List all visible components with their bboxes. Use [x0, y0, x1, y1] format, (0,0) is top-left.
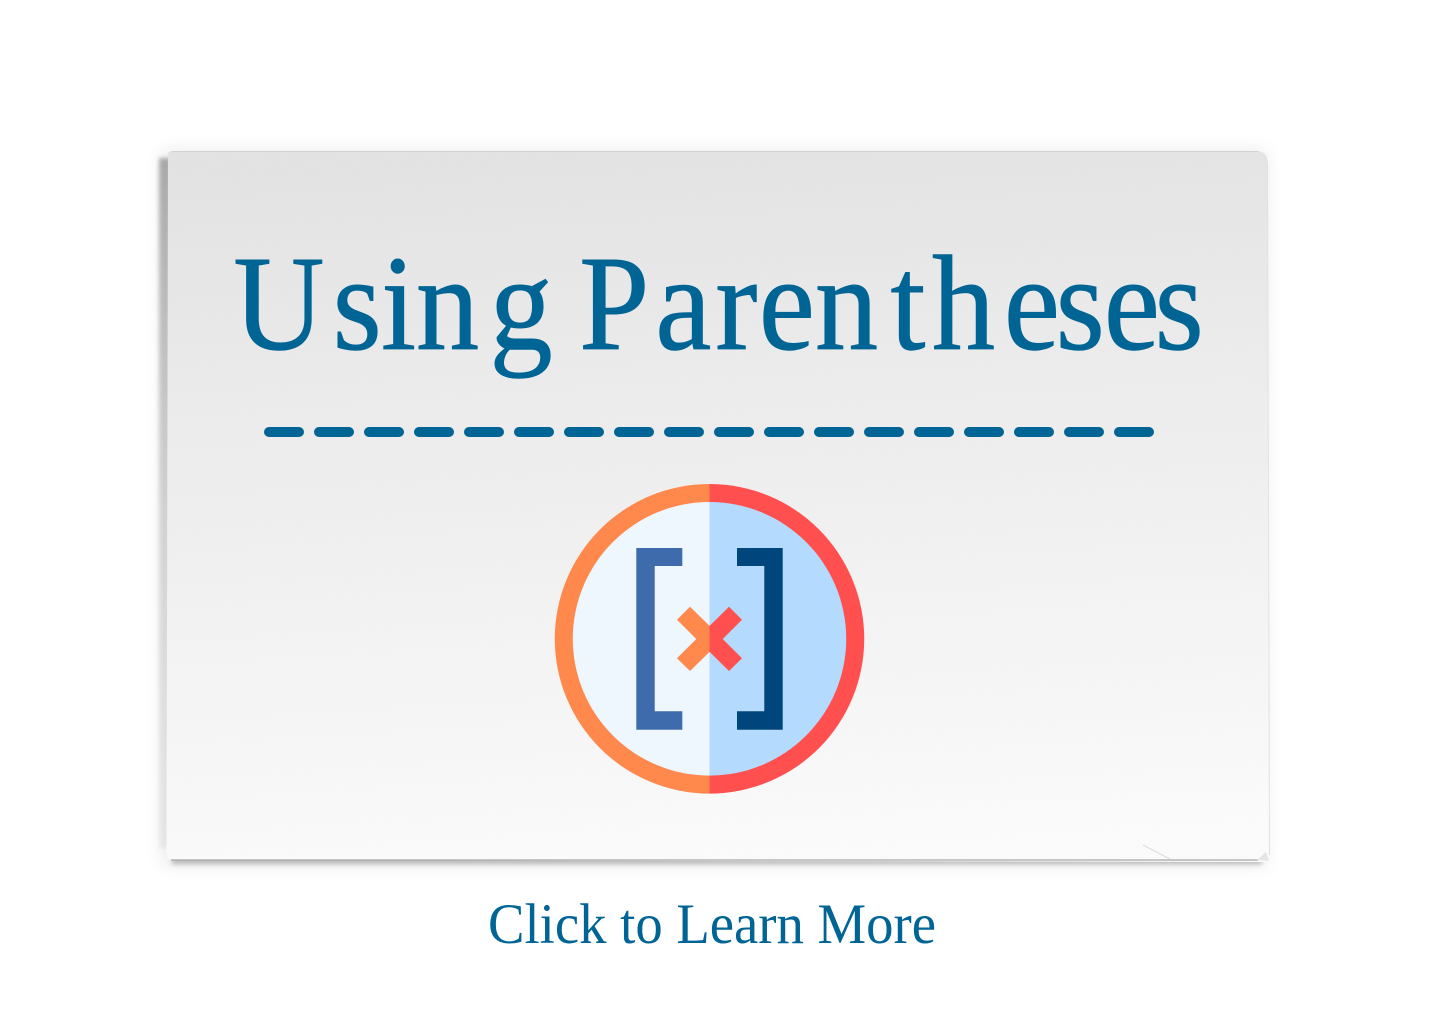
icon: left bracket [636, 548, 682, 730]
icon: outer ring [555, 484, 864, 794]
icon: cross [677, 607, 742, 671]
panel: paper card [159, 145, 1275, 867]
icon: inner disc [573, 502, 846, 776]
title: Using Parentheses [233, 229, 1204, 379]
icon: crossed-out brackets [555, 484, 864, 794]
dashed divider [269, 427, 1150, 437]
call to action: Click to Learn More [488, 893, 936, 956]
icon: right bracket [737, 548, 783, 730]
